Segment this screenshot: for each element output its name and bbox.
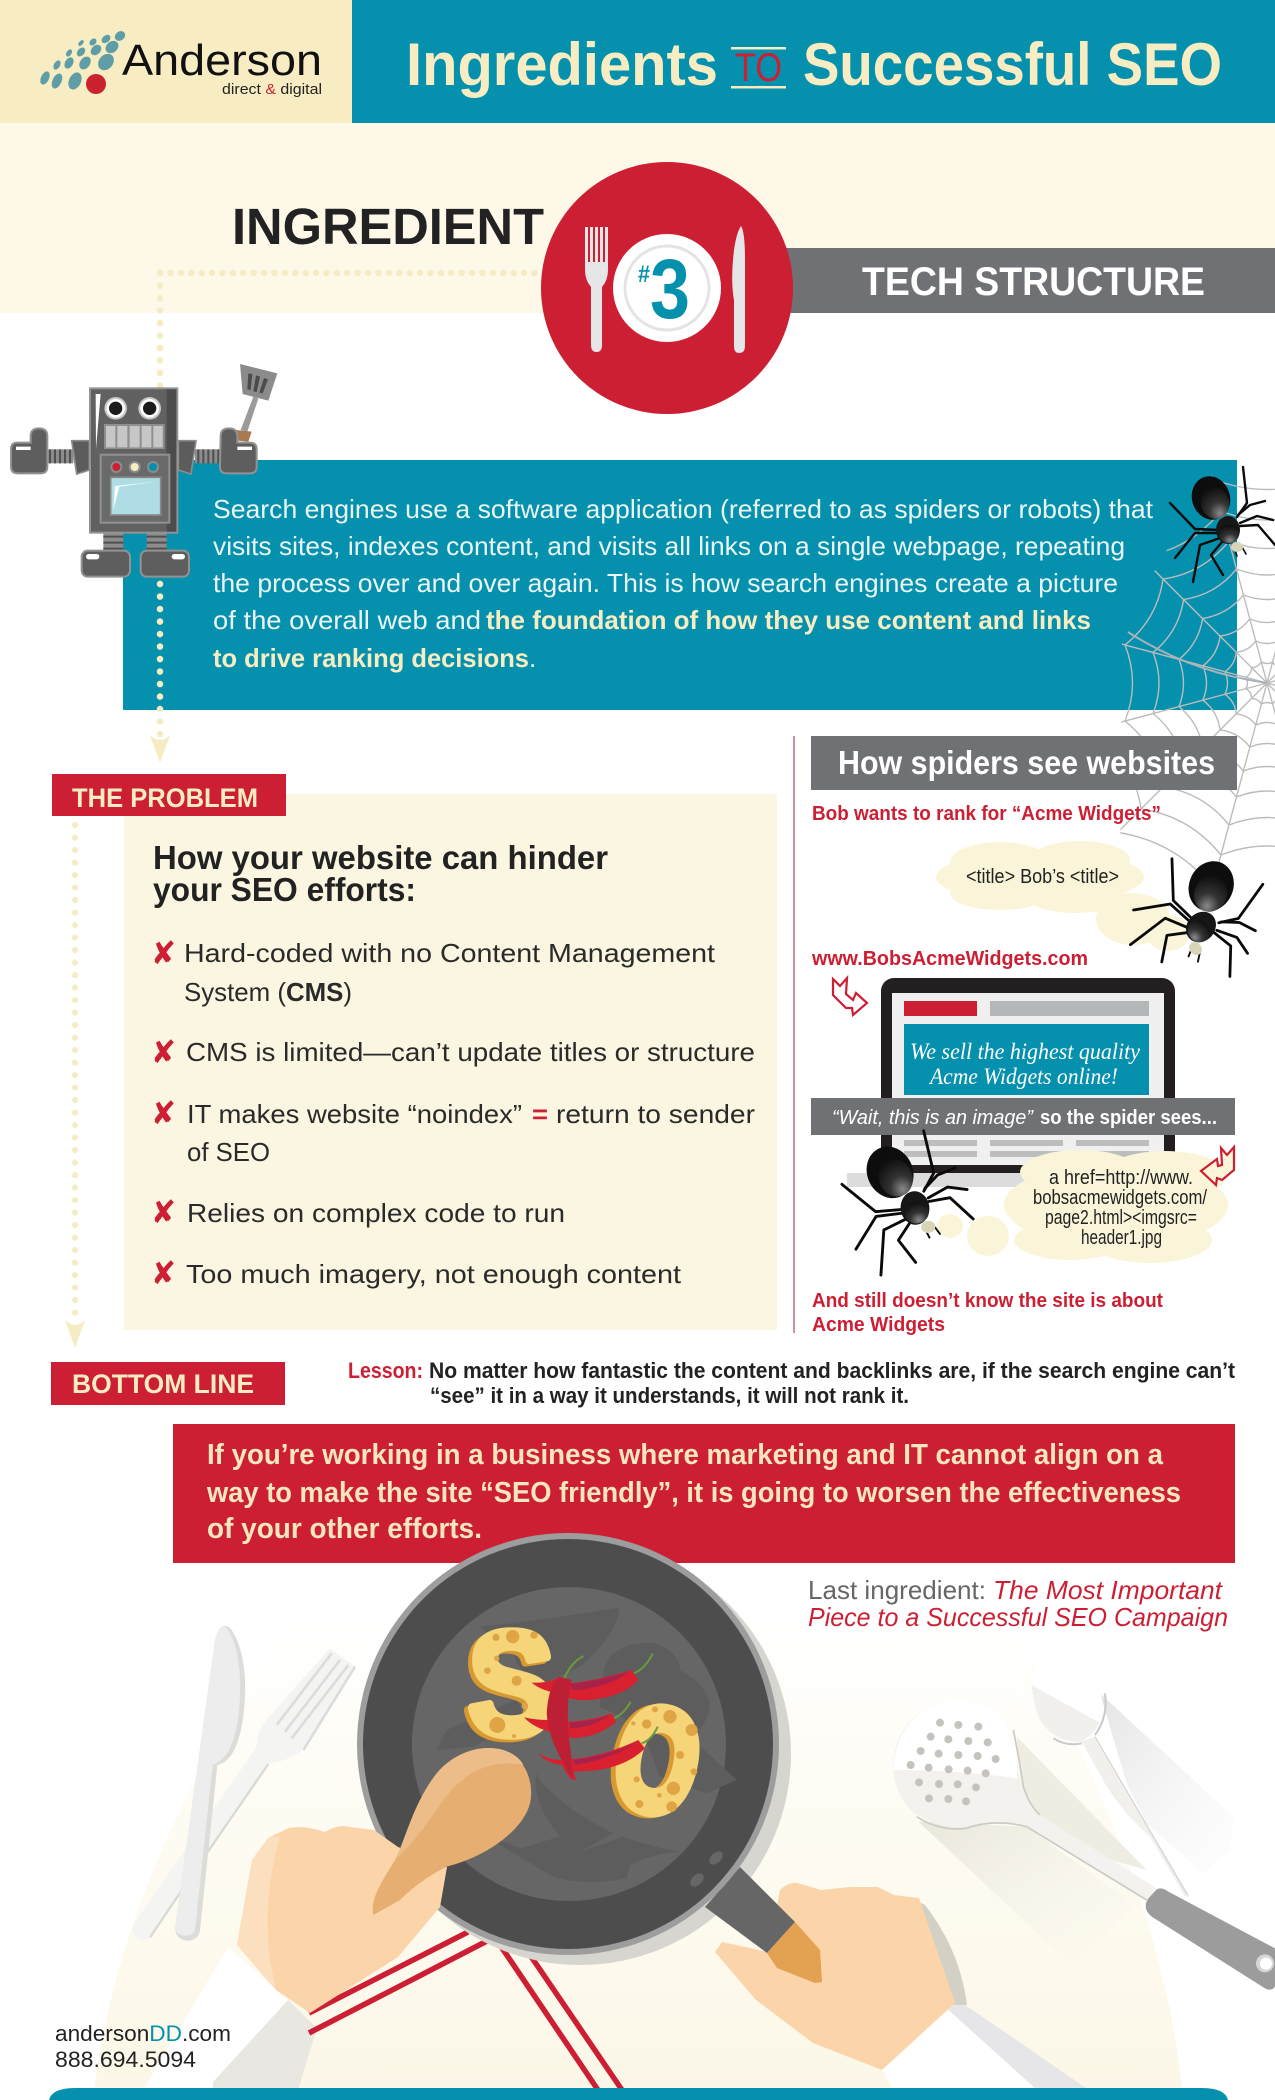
robot body (90, 388, 177, 533)
heading: ingredient: INGREDIENT (232, 198, 544, 255)
heading (153, 839, 608, 908)
icon: robot holding spatula (11, 364, 277, 577)
pan highlights (688, 1849, 725, 1889)
intro text (213, 494, 1154, 673)
slotted spoon upper shadow (1017, 1737, 1147, 1870)
frying pan (357, 1533, 779, 1955)
cheese holes S (484, 1630, 538, 1738)
intro text: visits sites, indexes content, and visits all links on a single webpage, repeating (213, 531, 1125, 561)
last ingredient text: Last ingredient: (808, 1575, 986, 1605)
label: bottom line (51, 1362, 285, 1405)
heading bar: How spiders see websites (838, 744, 1215, 781)
last ingredient text: The Most Important (993, 1575, 1224, 1605)
footer bar (49, 2088, 1228, 2100)
slotted spoon shadow (918, 1822, 1137, 1967)
wooden spoon drumstick (373, 1748, 531, 1915)
secondary dotted arrow (65, 825, 85, 1348)
footer contact: 888.694.5094 (55, 2047, 196, 2072)
spider web (1120, 475, 1275, 870)
handle hole (1256, 1954, 1274, 1972)
header: title banner (352, 0, 1275, 123)
grey band: spider sees (811, 1098, 1235, 1135)
last ingredient text: Piece to a Successful SEO Campaign (808, 1602, 1228, 1632)
conclusion text (812, 1290, 1163, 1336)
robot teeth (104, 424, 165, 449)
panel: how spiders see websites (793, 736, 1275, 1336)
callout: red summary: way to make the site “SEO friendly”, it is going to worsen the effectiveness (206, 1477, 1181, 1509)
intro text: the foundation of how they use content and links (486, 605, 1091, 635)
screen slogan: We sell the highest quality (910, 1039, 1141, 1064)
fork (132, 1648, 355, 1940)
label: bottom line: BOTTOM LINE (72, 1369, 254, 1399)
spatula (236, 364, 277, 442)
icon: fork (585, 227, 608, 352)
apron strings (309, 1932, 622, 2090)
intro text: Search engines use a software application (referred to as spiders or robots) that (213, 494, 1154, 524)
label: the problem (52, 774, 286, 816)
spoon holes (907, 1719, 1000, 1805)
icon: logo dots (38, 29, 127, 92)
spoon (1032, 1655, 1188, 1897)
seo made of cheese and chilis (464, 1602, 713, 1849)
footer contact: andersonDD.com (55, 2021, 231, 2046)
list items: = (532, 1099, 548, 1129)
icon: logo red dot (86, 74, 106, 94)
plate badge (541, 162, 793, 414)
bottom illustration background (93, 1620, 1183, 2100)
footer contact (55, 2021, 231, 2072)
spider lower (837, 1126, 979, 1278)
lesson text: No matter how fantastic the content and backlinks are, if the search engine can’t (429, 1358, 1236, 1383)
robot legs (103, 533, 167, 552)
list items: Relies on complex code to run (187, 1198, 565, 1228)
thought cloud: title: <title> Bob’s <title> (966, 866, 1119, 888)
title text: Ingredients (406, 31, 718, 98)
intro text: of the overall web and (213, 605, 481, 635)
list items: Too much imagery, not enough content (186, 1259, 682, 1289)
left sleeve (143, 1947, 317, 2090)
knife (175, 1626, 245, 1941)
slotted spoon (893, 1700, 1157, 1900)
icon: arrow to code (1201, 1147, 1234, 1185)
banner: tech structure: TECH STRUCTURE (862, 260, 1205, 304)
icon: knife (732, 226, 745, 353)
conclusion text: Acme Widgets (812, 1314, 945, 1336)
arrowhead (150, 735, 170, 763)
laptop (847, 978, 1177, 1187)
thought cloud: title (936, 841, 1190, 951)
heading: How your website can hinder (153, 839, 608, 876)
list items (184, 938, 755, 1289)
robot feet (82, 551, 189, 577)
foot highlights (86, 554, 185, 559)
list items: System (CMS) (184, 977, 352, 1007)
title text end: Successful SEO (803, 31, 1222, 98)
ingredient band background (0, 123, 1275, 313)
right hand (715, 1883, 955, 2070)
last ingredient text (808, 1575, 1228, 1632)
lesson text: “see” it in a way it understands, it will not rank it. (430, 1383, 909, 1408)
label: the problem: THE PROBLEM (72, 783, 258, 813)
dotted path from ingredient to robot (160, 273, 540, 395)
heading bar (811, 736, 1237, 790)
intro text: . (529, 643, 536, 673)
list items: CMS is limited—can’t update titles or structure (186, 1037, 755, 1067)
logo wordmark: Anderson (122, 36, 322, 85)
x marks (151, 934, 176, 1292)
cheese letter O: O (602, 1674, 713, 1847)
thought cloud: code: header1.jpg (1081, 1227, 1162, 1249)
list items: return to sender (556, 1099, 755, 1129)
cheese letter S: S (468, 1602, 555, 1766)
x marks: ✘ (151, 1033, 176, 1071)
thought cloud: code: a href=http://www. (1049, 1167, 1193, 1189)
goal text: Bob wants to rank for “Acme Widgets” (812, 803, 1161, 825)
panel: spider intro (123, 460, 1237, 710)
screen slogan: Acme Widgets online! (928, 1064, 1118, 1089)
thought cloud: code: page2.html><imgsrc= (1045, 1207, 1197, 1229)
pan reflections (437, 1607, 737, 1882)
grey band: spider sees: “Wait, this is an image” (832, 1107, 1034, 1129)
heading: your SEO efforts: (153, 871, 416, 908)
robot control panel (101, 455, 169, 523)
list items: Hard-coded with no Content Management (184, 938, 716, 968)
pan shadow (369, 1543, 791, 1965)
number three: 3 (650, 242, 690, 336)
icon: arrow to laptop (833, 978, 867, 1015)
x marks: ✘ (151, 1193, 176, 1231)
grey utensil handle (1146, 1888, 1275, 1990)
hand highlights (16, 447, 252, 450)
utensils left (132, 1626, 355, 1941)
banner: tech structure (770, 248, 1275, 313)
x marks: ✘ (151, 1254, 176, 1292)
cheese letter S: S (464, 1605, 551, 1769)
robot eyes (104, 397, 161, 420)
header: logo panel (0, 0, 352, 123)
thought cloud: code (937, 1150, 1228, 1263)
panel: how your website can hinder (124, 794, 777, 1330)
list items: IT makes website “noindex” (187, 1099, 522, 1129)
screen slogan (910, 1039, 1141, 1089)
intro text: the process over and over again. This is how search engines create a picture (213, 568, 1118, 598)
callout: red summary (173, 1424, 1235, 1563)
callout: red summary: If you’re working in a business where marketing and IT cannot align on a (207, 1439, 1164, 1471)
conclusion text: And still doesn’t know the site is about (812, 1290, 1163, 1312)
cheese holes O (631, 1706, 698, 1812)
robot arms (47, 441, 222, 474)
pan handle (705, 1867, 822, 1983)
x marks: ✘ (151, 934, 176, 972)
site url: www.BobsAcmeWidgets.com (811, 948, 1088, 970)
lesson text (348, 1358, 1236, 1408)
right sleeve (882, 2000, 1089, 2090)
dotted path from robot to problem (157, 584, 163, 735)
robot hands (11, 428, 257, 473)
left hand (237, 1826, 447, 2013)
hash mark: # (638, 261, 650, 288)
intro text: to drive ranking decisions (213, 643, 529, 673)
logo tagline: direct & digital (222, 81, 322, 98)
chili letter E (524, 1653, 658, 1781)
cheese letter O: O (597, 1675, 708, 1848)
right hand shadow (915, 1900, 967, 2005)
thought cloud: code: bobsacmewidgets.com/ (1033, 1187, 1207, 1209)
icon: spider top (1170, 467, 1275, 582)
callout: red summary: of your other efforts. (207, 1513, 482, 1545)
x marks: ✘ (151, 1094, 176, 1132)
title connector: TO (735, 46, 782, 90)
icon: plate (613, 234, 721, 342)
grey band: spider sees: so the spider sees... (1040, 1107, 1217, 1129)
lesson text: Lesson: (348, 1358, 423, 1383)
list items: of SEO (187, 1137, 270, 1167)
spoon shadow (1100, 1693, 1233, 1873)
spider on laptop (1111, 828, 1275, 1008)
utensils right (893, 1655, 1275, 1990)
